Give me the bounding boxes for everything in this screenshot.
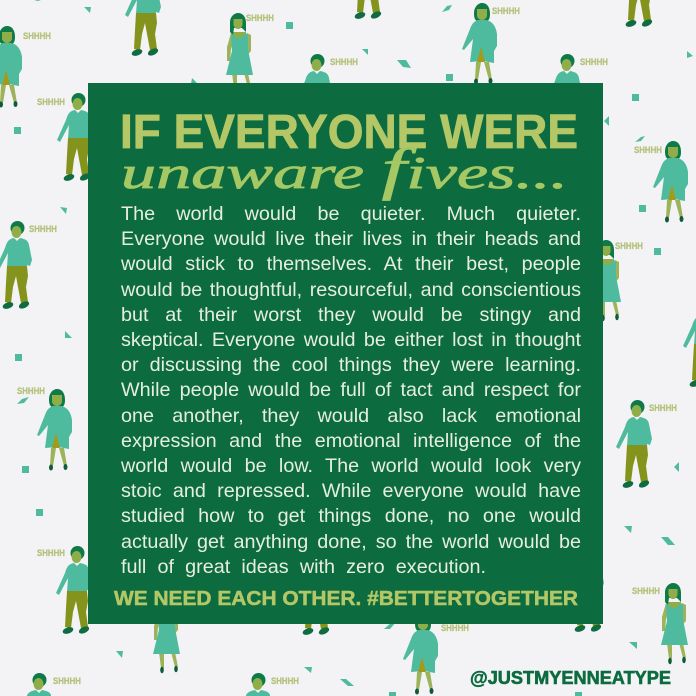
figure: man below panel: [296, 547, 332, 636]
figure: man above panel right: SHHHH: [580, 57, 608, 67]
figure: man bottom centre: [246, 673, 299, 696]
figure: woman in dress bottom right: SHHHH: [632, 586, 660, 596]
figure: woman in coat top right: [462, 3, 520, 84]
body text: While people would be full of tact and respect for: [121, 379, 581, 401]
body text: or discussing the cool things they were learning.: [121, 354, 581, 376]
body text: full of great ideas with zero execution.: [121, 556, 486, 578]
figure: woman in coat below panel: [403, 613, 469, 694]
figure: man below panel right: [568, 544, 604, 633]
figure: top-left woman in coat: [0, 26, 51, 108]
figure: man left edge: SHHHH: [29, 224, 57, 234]
script subtitle: unaware fives...: [121, 136, 568, 201]
body text: expression and the emotional intelligence of the: [121, 430, 581, 452]
figure: man right: [616, 400, 677, 489]
figure: man above panel centre: SHHHH: [330, 57, 358, 67]
figure: man right: SHHHH: [649, 403, 677, 413]
figure: man bottom left: [27, 673, 81, 696]
figure: woman in dress bottom right: [632, 583, 688, 664]
figure: man beside panel left: SHHHH: [37, 97, 65, 107]
figure: man left edge: [0, 221, 57, 310]
figure: man lower left: [37, 546, 92, 635]
figure: woman in dress top: [226, 13, 274, 94]
figure: woman in dress right of panel: [594, 240, 643, 321]
figure: woman in dress top: SHHHH: [246, 13, 274, 23]
figure: woman in coat right: SHHHH: [634, 145, 662, 155]
panel: main green card: [88, 83, 603, 624]
body text: would be thoughtful, resourceful, and conscientious: [121, 279, 581, 301]
figure: woman in coat left: [17, 386, 72, 470]
figure: man bottom left: SHHHH: [53, 676, 81, 686]
figure: woman in dress below panel: [153, 592, 180, 673]
figure: top-left woman in coat: SHHHH: [23, 31, 51, 41]
figure: man bottom centre: SHHHH: [271, 676, 299, 686]
figure: woman in coat left: SHHHH: [17, 386, 45, 396]
body text: but at their worst they would be stingy and: [121, 304, 581, 326]
body text: actually get anything done, so the world would be: [121, 531, 581, 553]
figure: man beside panel left: [37, 93, 93, 182]
figure: man at top left: [125, 0, 161, 57]
body text: skeptical. Everyone would be either lost in thought: [121, 329, 581, 351]
body text: [121, 203, 581, 578]
figure: woman in coat right: [634, 141, 688, 222]
figure: man at right edge: [683, 299, 696, 388]
body text: would stick to themselves. At their best, people: [121, 253, 581, 275]
figure: man above panel centre: [296, 54, 358, 143]
body text: The world would be quieter. Much quieter.: [121, 203, 581, 225]
figure: woman in coat below panel: SHHHH: [441, 623, 469, 633]
figure: man top right corner: [619, 0, 655, 28]
footer slogan: WE NEED EACH OTHER. #BETTERTOGETHER: [114, 587, 578, 610]
figure: woman in coat top right: SHHHH: [492, 6, 520, 16]
body text: one another, they would also lack emotional: [121, 405, 581, 427]
body text: Everyone would live their lives in their heads and: [121, 228, 581, 250]
body text: studied how to get things done, no one would: [121, 505, 581, 527]
body text: stoic and repressed. While everyone would have: [121, 480, 581, 502]
figure: woman in dress right of panel: SHHHH: [615, 241, 643, 251]
title: IF EVERYONE WERE: [120, 106, 578, 159]
figure: man top centre: [348, 0, 384, 20]
body text: world would be low. The world would look very: [121, 455, 581, 477]
figure: man lower left: SHHHH: [37, 548, 65, 558]
figure: man above panel right: [546, 54, 608, 143]
handle: @JUSTMYENNEATYPE: [470, 668, 671, 688]
